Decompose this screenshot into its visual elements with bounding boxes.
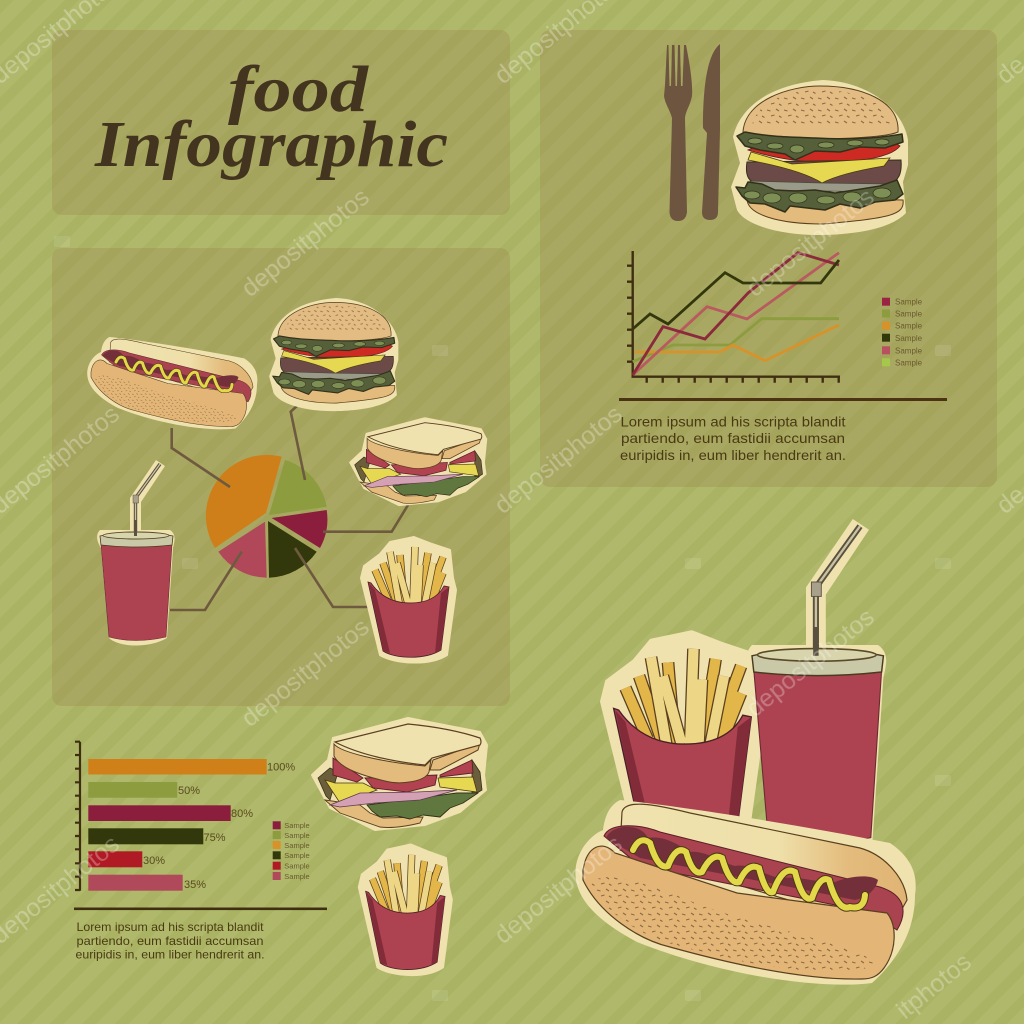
bar chart description: euripidis in, eum liber hendrerit an. (76, 948, 264, 962)
icon: drink cup (pie panel) (97, 460, 175, 646)
bar chart description: Lorem ipsum ad his scripta blandit (76, 920, 264, 934)
axes (627, 251, 840, 383)
pie chart (206, 455, 327, 578)
bar chart legend: Sample (284, 821, 310, 830)
bar: 35%: 35% (184, 879, 206, 891)
bar: 80%: 80% (231, 808, 253, 820)
bar: 100%: 100% (267, 762, 295, 774)
panel: pie chart (52, 248, 510, 706)
bar chart legend (273, 821, 310, 881)
bar: 75% (88, 828, 226, 844)
camera watermark marks (54, 236, 951, 1001)
bar chart legend: Sample (284, 851, 310, 860)
panel: line chart (540, 30, 997, 487)
watermarks: depositphotos (489, 400, 628, 520)
watermarks: depositphotos (741, 603, 880, 723)
bar chart axis (75, 742, 80, 891)
bar chart description: partiendo, eum fastidii accumsan (76, 934, 264, 948)
icon: fries (lower) (359, 844, 452, 975)
bar: 80% (88, 805, 253, 821)
panel: title (52, 30, 510, 215)
line chart (627, 251, 840, 383)
bar: 50% (88, 782, 200, 798)
line chart legend: Sample (895, 322, 923, 331)
bar chart legend: Sample (284, 831, 310, 840)
bar chart rule (74, 908, 327, 910)
bar: 35% (88, 875, 206, 891)
line chart rule (619, 398, 947, 401)
line chart description: partiendo, eum fastidii accumsan (621, 430, 845, 446)
icon: fork (664, 45, 692, 221)
watermarks: depositphotos (741, 183, 880, 303)
icon: knife (702, 44, 720, 220)
icon: hot dog (pie panel) (87, 337, 257, 429)
line chart legend: Sample (895, 346, 923, 356)
line chart legend: Sample (895, 298, 923, 306)
illustration: fries, drink and hot dog combo (575, 519, 916, 985)
icon: burger (top right) (731, 80, 908, 235)
icon: sandwich (pie panel) (350, 418, 486, 505)
watermarks: itphotos (891, 948, 977, 1024)
bar chart legend: Sample (284, 862, 310, 870)
line chart description (620, 414, 846, 463)
bar: 100% (88, 759, 295, 774)
line chart legend: Sample (895, 310, 923, 318)
pie chart connectors (170, 405, 408, 610)
bar: 30% (88, 851, 165, 867)
icon: burger (pie panel) (269, 298, 398, 411)
line chart description: euripidis in, eum liber hendrerit an. (620, 447, 846, 463)
line chart legend (882, 298, 923, 368)
bar chart legend: Sample (284, 872, 310, 881)
watermarks: depositphotos (489, 830, 628, 950)
icon: sandwich (lower) (312, 718, 487, 830)
bar chart description (76, 920, 264, 962)
line chart legend: Sample (895, 334, 923, 343)
line chart description: Lorem ipsum ad his scripta blandit (620, 414, 846, 430)
bar: 75%: 75% (204, 832, 226, 844)
watermarks: depositphotos (236, 613, 375, 733)
bar: 50%: 50% (178, 785, 200, 797)
bar chart legend: Sample (284, 841, 310, 850)
bar chart (75, 742, 295, 891)
line chart legend: Sample (895, 358, 923, 368)
icon: fries (pie panel) (361, 537, 456, 663)
bar: 30%: 30% (143, 855, 165, 867)
title: food (228, 53, 369, 126)
title (94, 53, 448, 181)
title: Infographic (94, 108, 448, 181)
watermarks: depositphotos (236, 183, 375, 303)
